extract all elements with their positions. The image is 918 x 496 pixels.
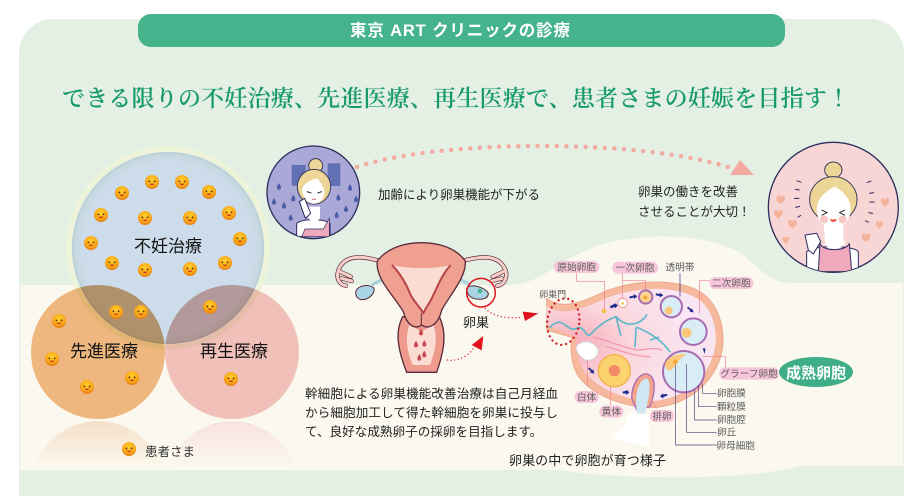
circle: regenerative medicine [165, 285, 299, 419]
label: 再生医療: 再生医療 [200, 342, 268, 361]
label: 不妊治療: 不妊治療 [134, 237, 202, 256]
caption: ovary diagram: 卵巣の中で卵胞が育つ様子 [509, 453, 666, 468]
text: improve ovary function: させることが大切！ [638, 204, 751, 219]
ovulating follicle and egg release [612, 374, 654, 447]
text: aging: 加齢により卵巣機能が下がる [378, 187, 540, 202]
badge: mature follicle [779, 357, 853, 387]
blood vessels [550, 315, 670, 357]
diagram: ovary cross-section [539, 261, 779, 452]
diagram labels: 卵丘 [717, 427, 737, 439]
red dotted arrow to label [447, 336, 483, 360]
diagram labels: 原始卵胞 [557, 261, 596, 273]
illustration: sad woman [267, 146, 360, 239]
circle: advanced medicine [31, 285, 165, 419]
diagram labels [539, 261, 778, 452]
label: ovary: 卵巣 [463, 315, 489, 330]
illustration: happy woman [768, 142, 898, 272]
red dotted arrow to ovary section [485, 308, 538, 321]
blood drops [414, 329, 426, 361]
diagram labels: 排卵 [652, 410, 672, 422]
hearts [774, 195, 889, 244]
ovary body [547, 282, 723, 407]
vagina [398, 317, 444, 372]
growth arrows [588, 293, 706, 398]
uterus body [377, 243, 465, 327]
badge text: 成熟卵胞 [786, 364, 846, 382]
diagram labels: 卵母細胞 [716, 440, 755, 452]
diagram labels: 卵巣門 [539, 288, 566, 299]
dotted arc arrow [343, 146, 754, 175]
follicles [602, 290, 707, 392]
legend: patient: 患者さま [145, 445, 195, 459]
body text: treatment description: から細胞加工して得た幹細胞を卵巣に投与し [305, 405, 558, 420]
venn diagram [31, 149, 299, 470]
fallopian tubes [337, 257, 506, 286]
label: 先進医療: 先進医療 [70, 342, 138, 361]
leader lines [577, 273, 726, 445]
overlap shading [80, 285, 255, 344]
body text: treatment description: 幹細胞による卵巣機能改善治療は自己月経血 [305, 387, 558, 401]
ovarian hilum dotted ring [544, 296, 582, 347]
circle: infertility treatment [69, 149, 267, 347]
ovary ligaments and ovaries [356, 279, 488, 300]
patient icons [45, 175, 247, 394]
header pill [138, 14, 785, 47]
corpus luteum [598, 355, 630, 387]
body text: treatment description: て、良好な成熟卵子の採卵を目指します。 [305, 424, 542, 439]
diagram labels: 白体 [577, 391, 597, 403]
diagram labels: 黄体 [602, 406, 621, 418]
diagram labels: グラーフ卵胞 [720, 368, 778, 380]
text: improve ovary function: 卵巣の働きを改善 [638, 184, 738, 199]
legend: patient [122, 442, 195, 459]
red highlight ring [467, 278, 495, 307]
diagram labels: 二次卵胞 [712, 277, 751, 289]
diagram labels: 卵胞腔 [717, 414, 746, 426]
corpus albicans [576, 342, 598, 360]
diagram labels: 卵胞膜 [717, 388, 746, 400]
title: できる限りの不妊治療、先進医療、再生医療で、患者さまの妊娠を目指す！ [62, 86, 850, 111]
reflections below circles [34, 421, 296, 470]
label pills [554, 261, 779, 422]
illustration: uterus [337, 243, 538, 372]
diagram labels: 透明帯 [666, 261, 695, 273]
panel: cream lower area [20, 237, 903, 477]
diagram labels: 顆粒膜 [717, 401, 746, 413]
header text: 東京 ART クリニックの診療 [350, 21, 570, 40]
diagram labels: 一次卵胞 [616, 262, 655, 274]
